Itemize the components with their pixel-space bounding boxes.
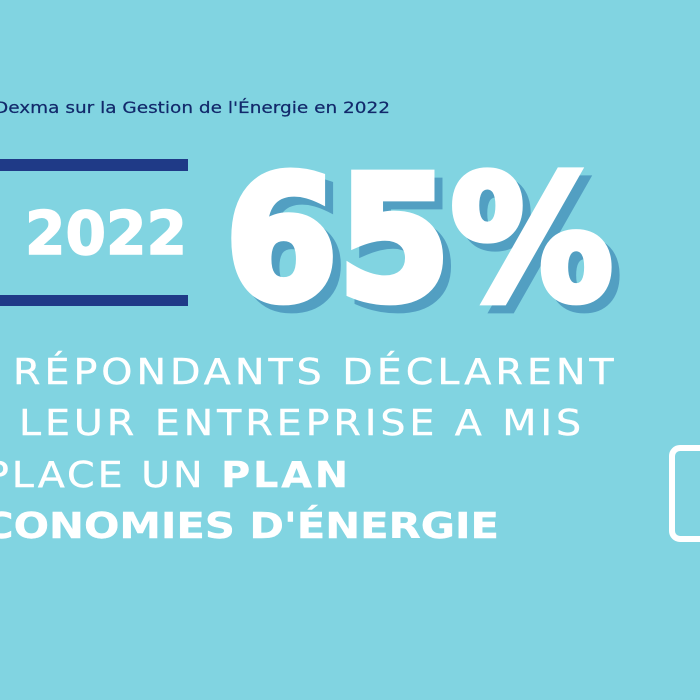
line 2: LEUR ENTREPRISE A MIS	[19, 402, 581, 444]
year block	[0, 159, 188, 306]
line 1: RÉPONDANTS DÉCLARENT	[13, 351, 615, 393]
percentage shadow: 65%	[233, 147, 621, 348]
source line: Dexma sur la Gestion de l'Énergie en 2022	[0, 98, 390, 117]
top bar	[0, 159, 188, 171]
big percentage	[225, 139, 621, 348]
bottom bar	[0, 295, 188, 306]
statement text	[0, 351, 615, 547]
year label: 2022	[25, 199, 187, 269]
icon: rounded frame	[672, 448, 700, 539]
percentage value: 65%	[225, 139, 613, 340]
